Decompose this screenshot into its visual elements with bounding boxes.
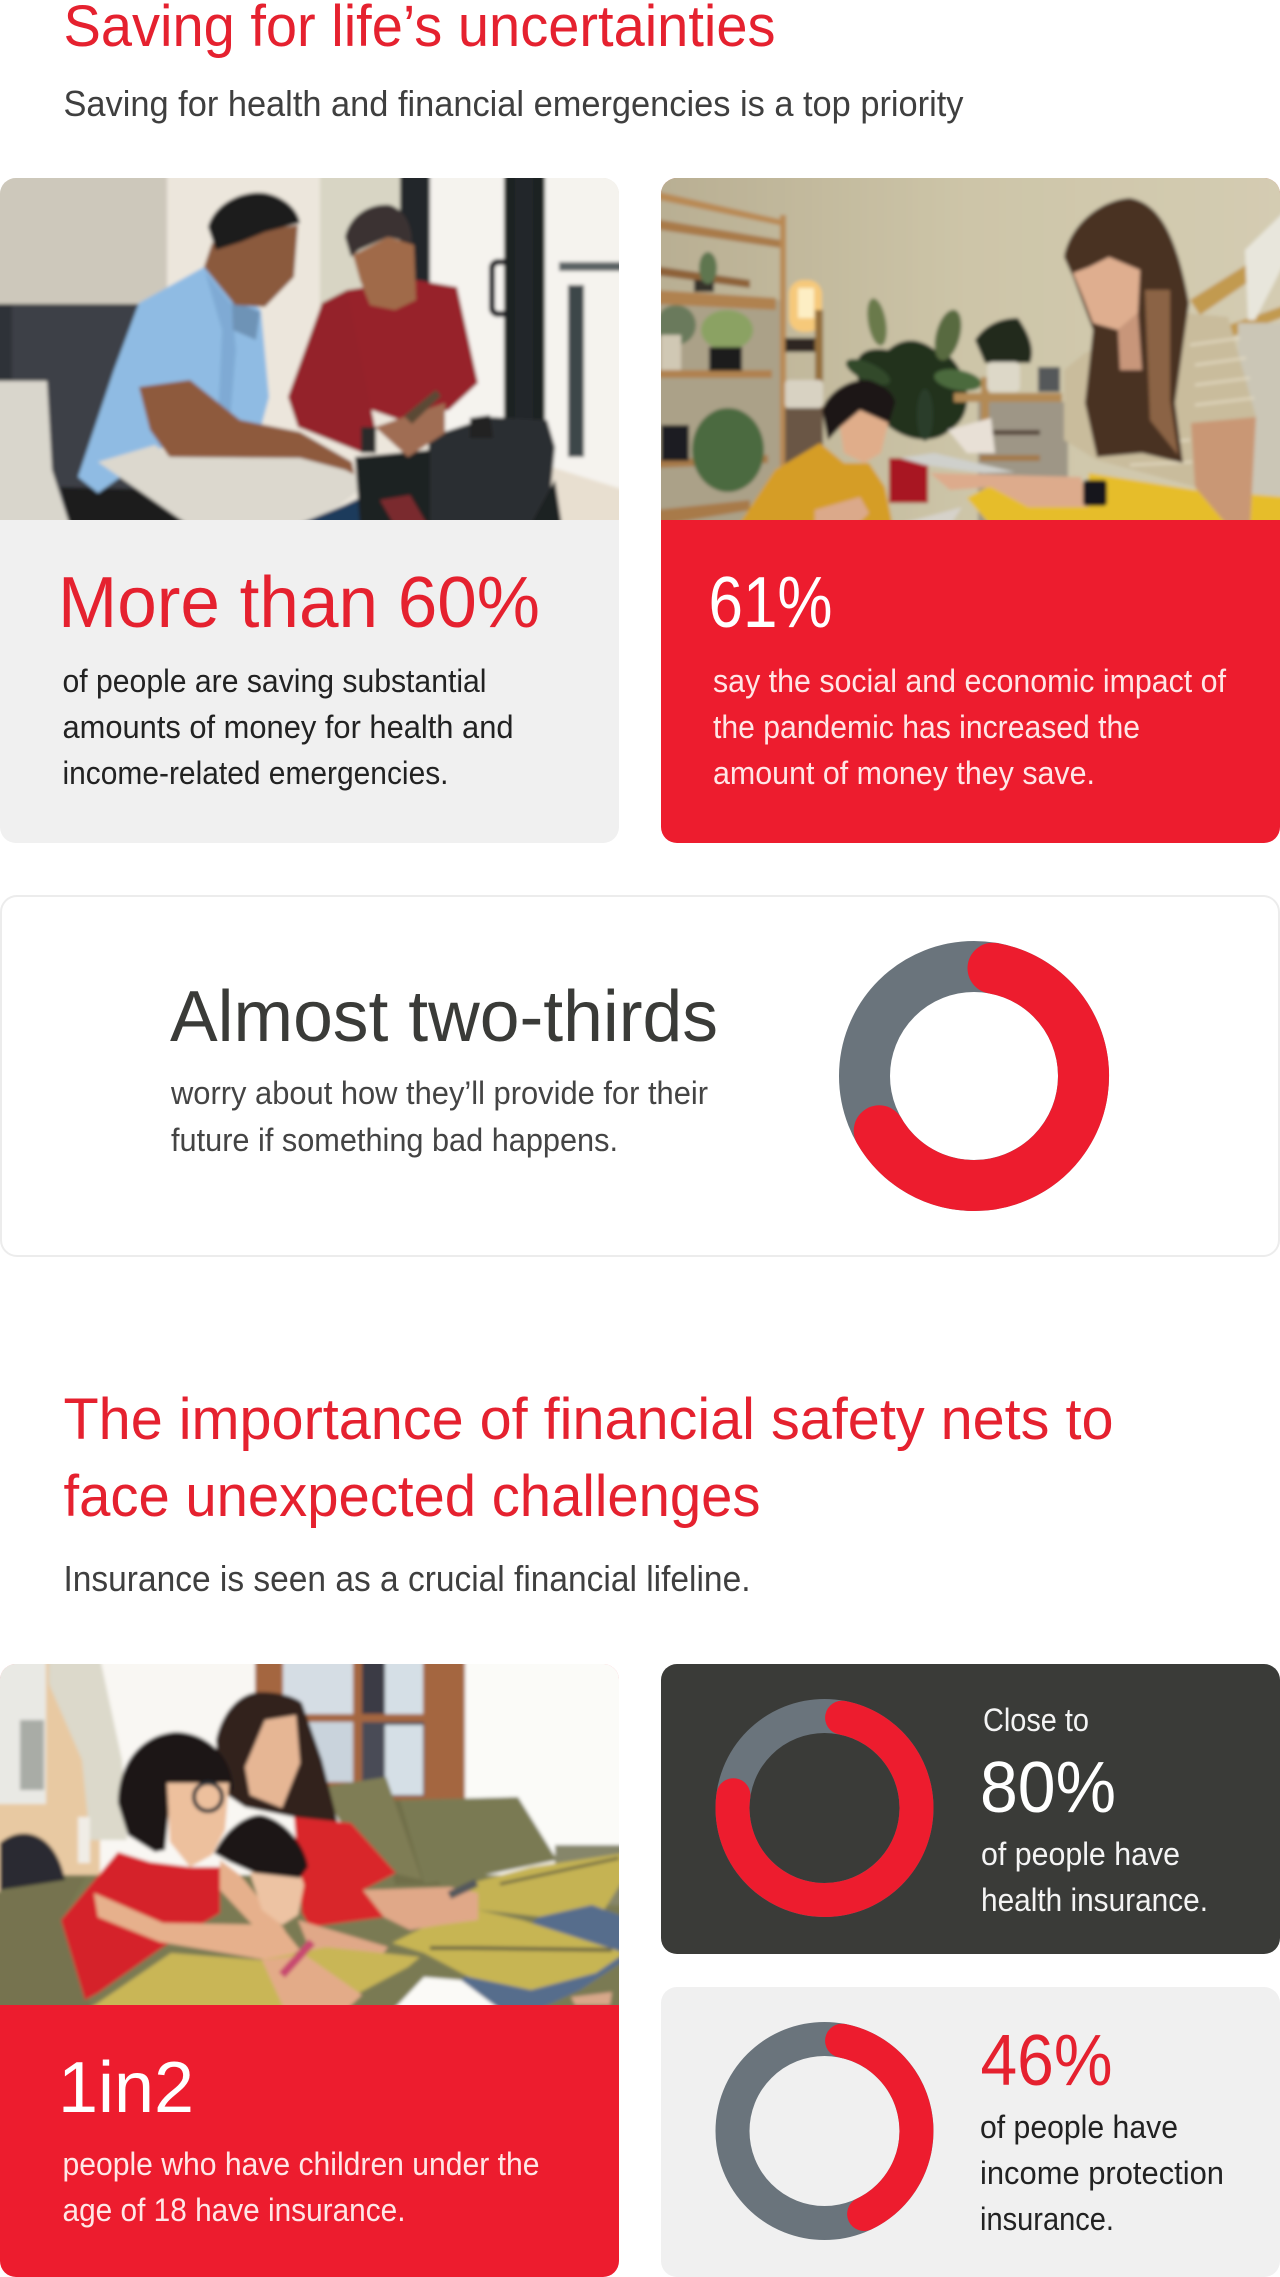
text: people with children: age of 18 have insurance. — [62, 2192, 406, 2228]
photo: two men looking at a phone — [0, 172, 625, 526]
text: pandemic savings: say the social and economic impact of — [713, 663, 1226, 699]
text: health insurance: of people have — [981, 1836, 1180, 1872]
panel: income protection card — [661, 1987, 1280, 2277]
panel: almost two-thirds card — [1, 896, 1279, 1256]
panel: health insurance card — [661, 1664, 1280, 1954]
text: saving for emergencies: amounts of money for health and — [62, 709, 514, 745]
text: saving for emergencies: of people are saving substantial — [62, 663, 486, 699]
stat: 46%: 46% — [980, 2021, 1112, 2101]
donut chart: two-thirds — [864, 966, 1084, 1186]
text: people with children — [62, 2146, 540, 2228]
photo: mother and child with papers — [655, 172, 1280, 526]
subtitle: saving priority: Saving for health and financial emergencies is a top priority — [64, 83, 964, 124]
text: income protection — [980, 2109, 1224, 2237]
text: pandemic savings — [713, 663, 1226, 791]
photo: family on a sofa — [0, 1658, 625, 2011]
panel: 1 in 2 card — [0, 1658, 625, 2277]
text: pandemic savings: the pandemic has increased the — [713, 709, 1140, 745]
stat: 80%: 80% — [980, 1748, 1116, 1828]
text: people with children: people who have children under the — [62, 2146, 540, 2182]
stat: 61%: 61% — [708, 563, 832, 643]
heading: importance of financial safety nets: The importance of financial safety nets to — [64, 1387, 1114, 1452]
panel: 61% card — [655, 172, 1280, 843]
donut chart: 80% — [732, 1716, 917, 1900]
heading: importance of financial safety nets — [64, 1387, 1114, 1529]
text: worry about the future — [170, 1075, 708, 1158]
text: pandemic savings: amount of money they save. — [713, 755, 1095, 791]
text: health insurance — [981, 1836, 1208, 1918]
text: worry about the future: worry about how they’ll provide for their — [170, 1075, 708, 1111]
stat: 1 in 2: 1in2 — [58, 2048, 194, 2128]
donut chart: 46% — [732, 2039, 916, 2223]
text: health insurance: health insurance. — [981, 1882, 1208, 1918]
text: saving for emergencies: income-related emergencies. — [62, 755, 448, 791]
panel: more than 60% card — [0, 172, 625, 843]
text: income protection: income protection — [980, 2155, 1224, 2191]
text: worry about the future: future if something bad happens. — [171, 1122, 618, 1158]
text: income protection: insurance. — [980, 2201, 1114, 2237]
subtitle: insurance lifeline: Insurance is seen as a crucial financial lifeline. — [64, 1558, 750, 1599]
text: close to: Close to — [983, 1702, 1089, 1738]
stat: more than 60%: More than 60% — [58, 563, 540, 643]
text: saving for emergencies — [62, 663, 514, 791]
heading: importance of financial safety nets: face unexpected challenges — [64, 1464, 760, 1529]
text: income protection: of people have — [980, 2109, 1178, 2145]
stat: almost two-thirds: Almost two-thirds — [170, 977, 718, 1057]
